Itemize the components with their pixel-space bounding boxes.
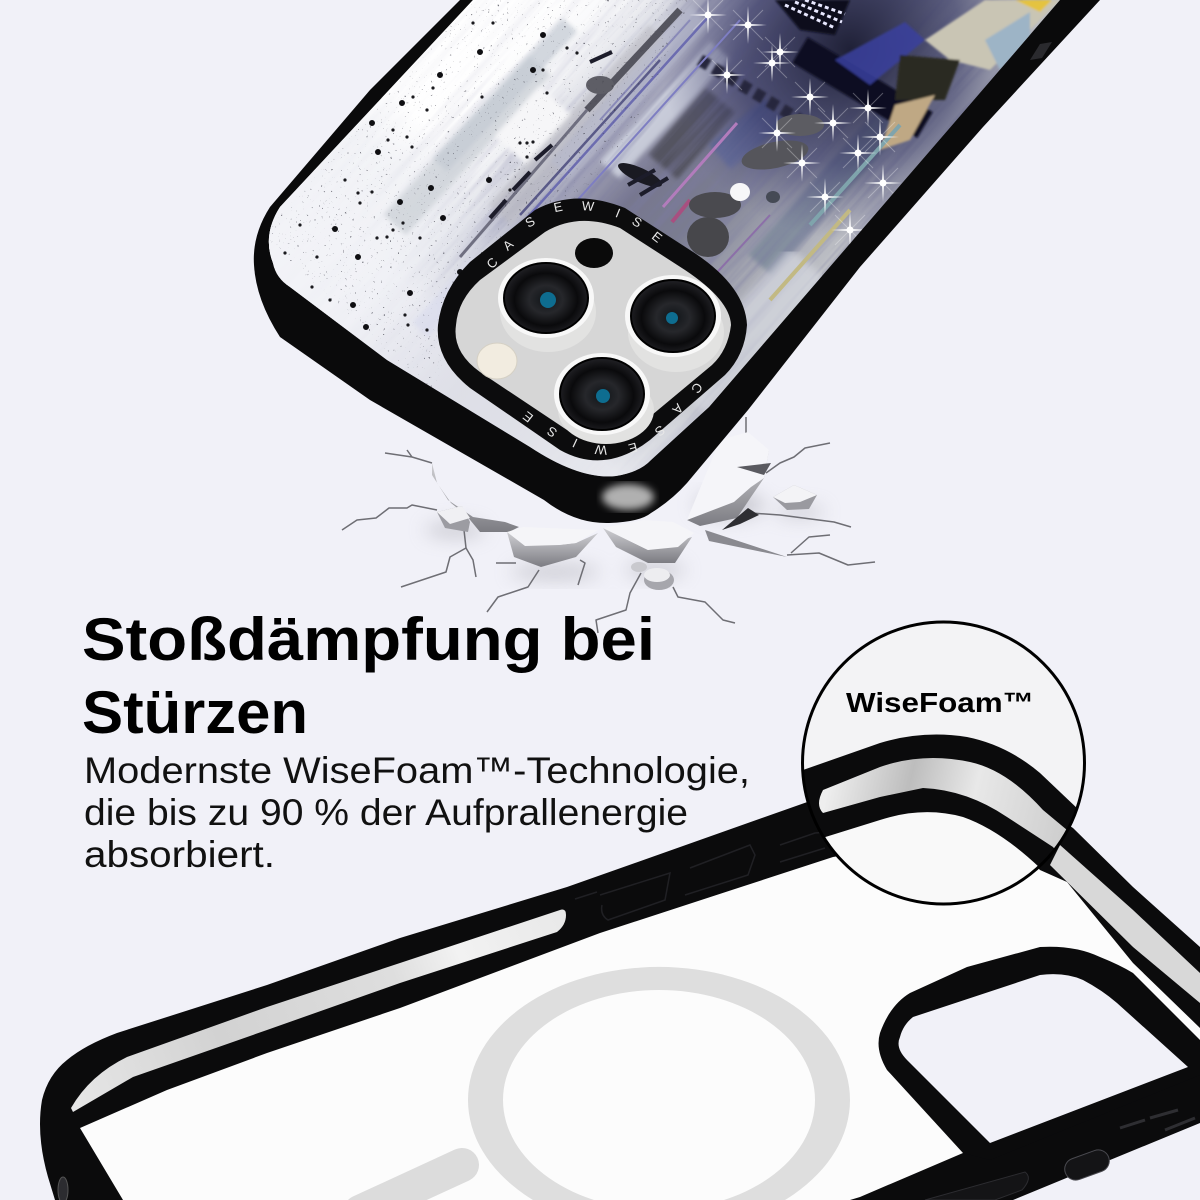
brand lower: I <box>570 435 580 451</box>
body text: absorbiert. <box>84 834 275 875</box>
callout label: WiseFoam™ <box>846 687 1034 718</box>
silver phone body <box>456 221 731 441</box>
lens three <box>554 353 650 435</box>
heading: Stürzen <box>82 679 308 746</box>
artwork back plate <box>268 0 1060 476</box>
crack lines <box>342 417 875 633</box>
alignment pill <box>360 1165 462 1200</box>
heading: Stoßdämpfung bei <box>82 606 655 673</box>
left white wash <box>268 0 678 341</box>
brand lower: S <box>544 423 560 441</box>
skyline windows <box>785 0 845 28</box>
left broken rim <box>432 463 519 532</box>
grey brushed patches <box>395 15 700 330</box>
body text: Modernste WiseFoam™-Technologie, <box>84 750 750 791</box>
black bumper <box>254 0 1100 523</box>
clear interior <box>80 830 1200 1200</box>
magnified case corner <box>804 734 1076 866</box>
brand lower: E <box>520 408 536 426</box>
brand upper: S <box>629 213 645 231</box>
brand upper: C <box>483 254 501 272</box>
island ring <box>438 198 747 460</box>
brand lower: C <box>688 380 706 396</box>
brand upper: W <box>581 198 595 214</box>
grey ink blots <box>586 76 824 257</box>
brand lower: A <box>669 401 686 417</box>
fragment left <box>437 506 470 532</box>
flash <box>477 343 517 379</box>
lower light wash <box>268 111 710 476</box>
cracked wall impact <box>342 417 875 633</box>
brand upper <box>483 198 665 272</box>
brand lower <box>520 380 706 458</box>
dark skyline <box>673 0 1004 229</box>
large splatter dots <box>335 35 543 327</box>
camera island <box>438 198 747 460</box>
body text <box>84 750 750 875</box>
magnetic ring <box>468 967 850 1200</box>
right light wash <box>690 265 810 400</box>
circle outline <box>802 622 1084 904</box>
right broken rim <box>687 432 771 530</box>
camera cutout <box>879 947 1200 1160</box>
lens two <box>625 275 721 357</box>
heading <box>82 606 655 746</box>
bottom clear case <box>40 771 1200 1200</box>
drip lines <box>460 10 900 300</box>
side button <box>1030 42 1052 60</box>
brand lower: E <box>627 440 639 456</box>
circle fill <box>802 622 1084 904</box>
sparkles <box>689 0 902 249</box>
fine splatter <box>260 0 700 400</box>
brand upper: E <box>649 228 665 246</box>
brand upper: S <box>522 213 538 231</box>
sensor dot <box>575 238 613 268</box>
side buttons <box>575 832 830 920</box>
soft shadows <box>425 491 825 580</box>
brand lower: W <box>594 442 608 458</box>
body text: die bis zu 90 % der Aufprallenergie <box>84 792 688 833</box>
wedge crack <box>705 530 787 557</box>
black frame <box>40 771 1200 1200</box>
callout circle <box>801 620 1086 906</box>
brand upper: E <box>552 199 564 215</box>
paint drips <box>404 0 973 464</box>
lens one <box>498 258 594 338</box>
left gap stripe <box>71 910 566 1112</box>
brand upper: A <box>500 236 516 253</box>
bumper reflection <box>602 484 654 510</box>
lens housings <box>500 272 724 444</box>
fragment centre left <box>507 527 598 567</box>
ink marks <box>490 52 668 218</box>
right gap stripe <box>1050 845 1200 1003</box>
fragment centre right <box>603 520 694 563</box>
rock right <box>773 485 817 510</box>
brand lower: S <box>652 422 668 440</box>
brand upper: I <box>614 205 622 221</box>
colour wash bands <box>610 50 890 265</box>
small rocks <box>631 562 674 590</box>
small splatter dots <box>285 23 577 330</box>
top phone case <box>254 0 1100 523</box>
bottom ports <box>58 1110 1195 1200</box>
